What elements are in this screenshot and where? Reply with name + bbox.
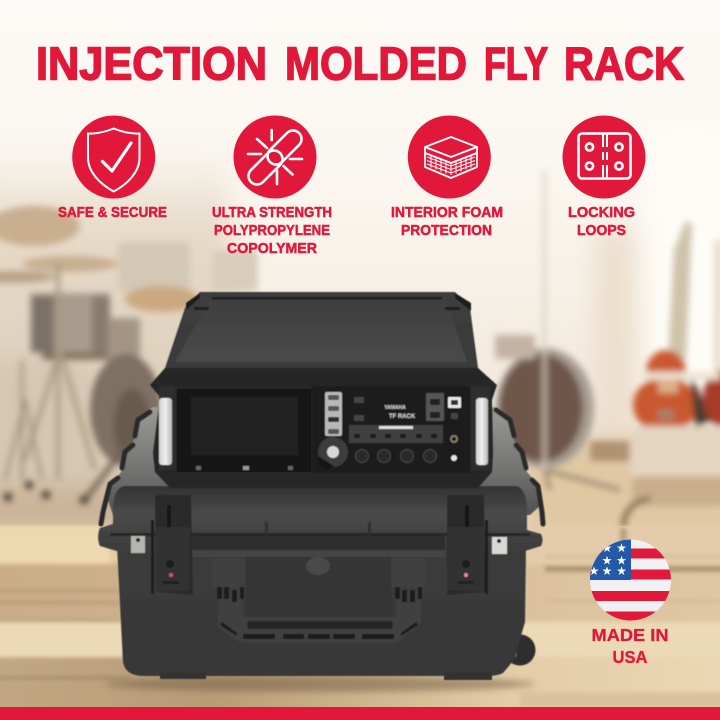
feature: interior foam [391,116,503,239]
feature: safe and secure [58,116,167,221]
made in usa badge [589,539,671,667]
label: made in usa: USA [612,647,648,667]
label: interior foam protection: INTERIOR FOAM [391,205,503,221]
icon: us flag circle: ★ [616,554,627,568]
icon: us flag circle: ★ [602,554,612,568]
label: made in usa [592,625,668,667]
label: polypropylene copolymer: ULTRA STRENGTH [212,205,332,221]
title: FLY [484,38,548,90]
screen panel [176,388,312,473]
control panel: TF RACK [389,414,416,420]
front handle [212,558,425,643]
label: safe and secure: SAFE & SECURE [58,205,167,221]
silver tabs [131,536,507,554]
label: interior foam protection: PROTECTION [401,223,492,239]
icon: us flag circle: ★ [616,564,627,578]
right latch [447,495,488,595]
label: locking loops: LOOPS [577,223,626,239]
icon: us flag circle: ★ [616,541,627,555]
control panel: YAMAHA [384,405,406,411]
icon: us flag circle: ★ [602,564,612,578]
feature: polypropylene copolymer [212,116,332,257]
label: polypropylene copolymer [212,205,332,257]
center badge [306,557,330,575]
rack corner brackets [186,293,471,311]
icon: hinge plate [562,116,646,198]
title: INJECTION [36,38,267,90]
control panel [312,386,470,473]
left handle [159,398,172,465]
wheel [504,634,536,666]
bottom red bar [0,707,720,720]
title [36,38,684,90]
left latch [151,495,193,595]
icon: chain link [234,116,316,198]
rack mixer [150,292,497,488]
icon: us flag circle [589,539,671,622]
icon: us flag circle: ★ [589,564,599,578]
case lid sides [101,407,543,524]
label: locking loops [568,205,635,239]
label: interior foam protection [391,205,503,239]
title: MOLDED [285,38,467,90]
side ears [159,386,490,470]
feature: locking loops [562,116,646,239]
label: made in usa: MADE IN [592,625,668,645]
label: polypropylene copolymer: POLYPROPYLENE [214,223,330,239]
front seam band [110,522,530,557]
handle recess [246,557,392,619]
icon: shield with check [72,116,155,198]
wooden table [0,526,720,712]
icon: us flag circle: ★ [602,541,612,555]
case lid top [98,486,543,555]
case body [117,546,526,676]
label: locking loops: LOCKING [568,205,635,221]
hard case [98,407,543,680]
label: polypropylene copolymer: COPOLYMER [227,241,318,257]
right handle [476,398,488,465]
rack top face [165,292,478,368]
rack front band [150,368,497,488]
title: RACK [564,38,684,90]
icon: foam block [408,116,491,198]
case feet [160,672,492,680]
